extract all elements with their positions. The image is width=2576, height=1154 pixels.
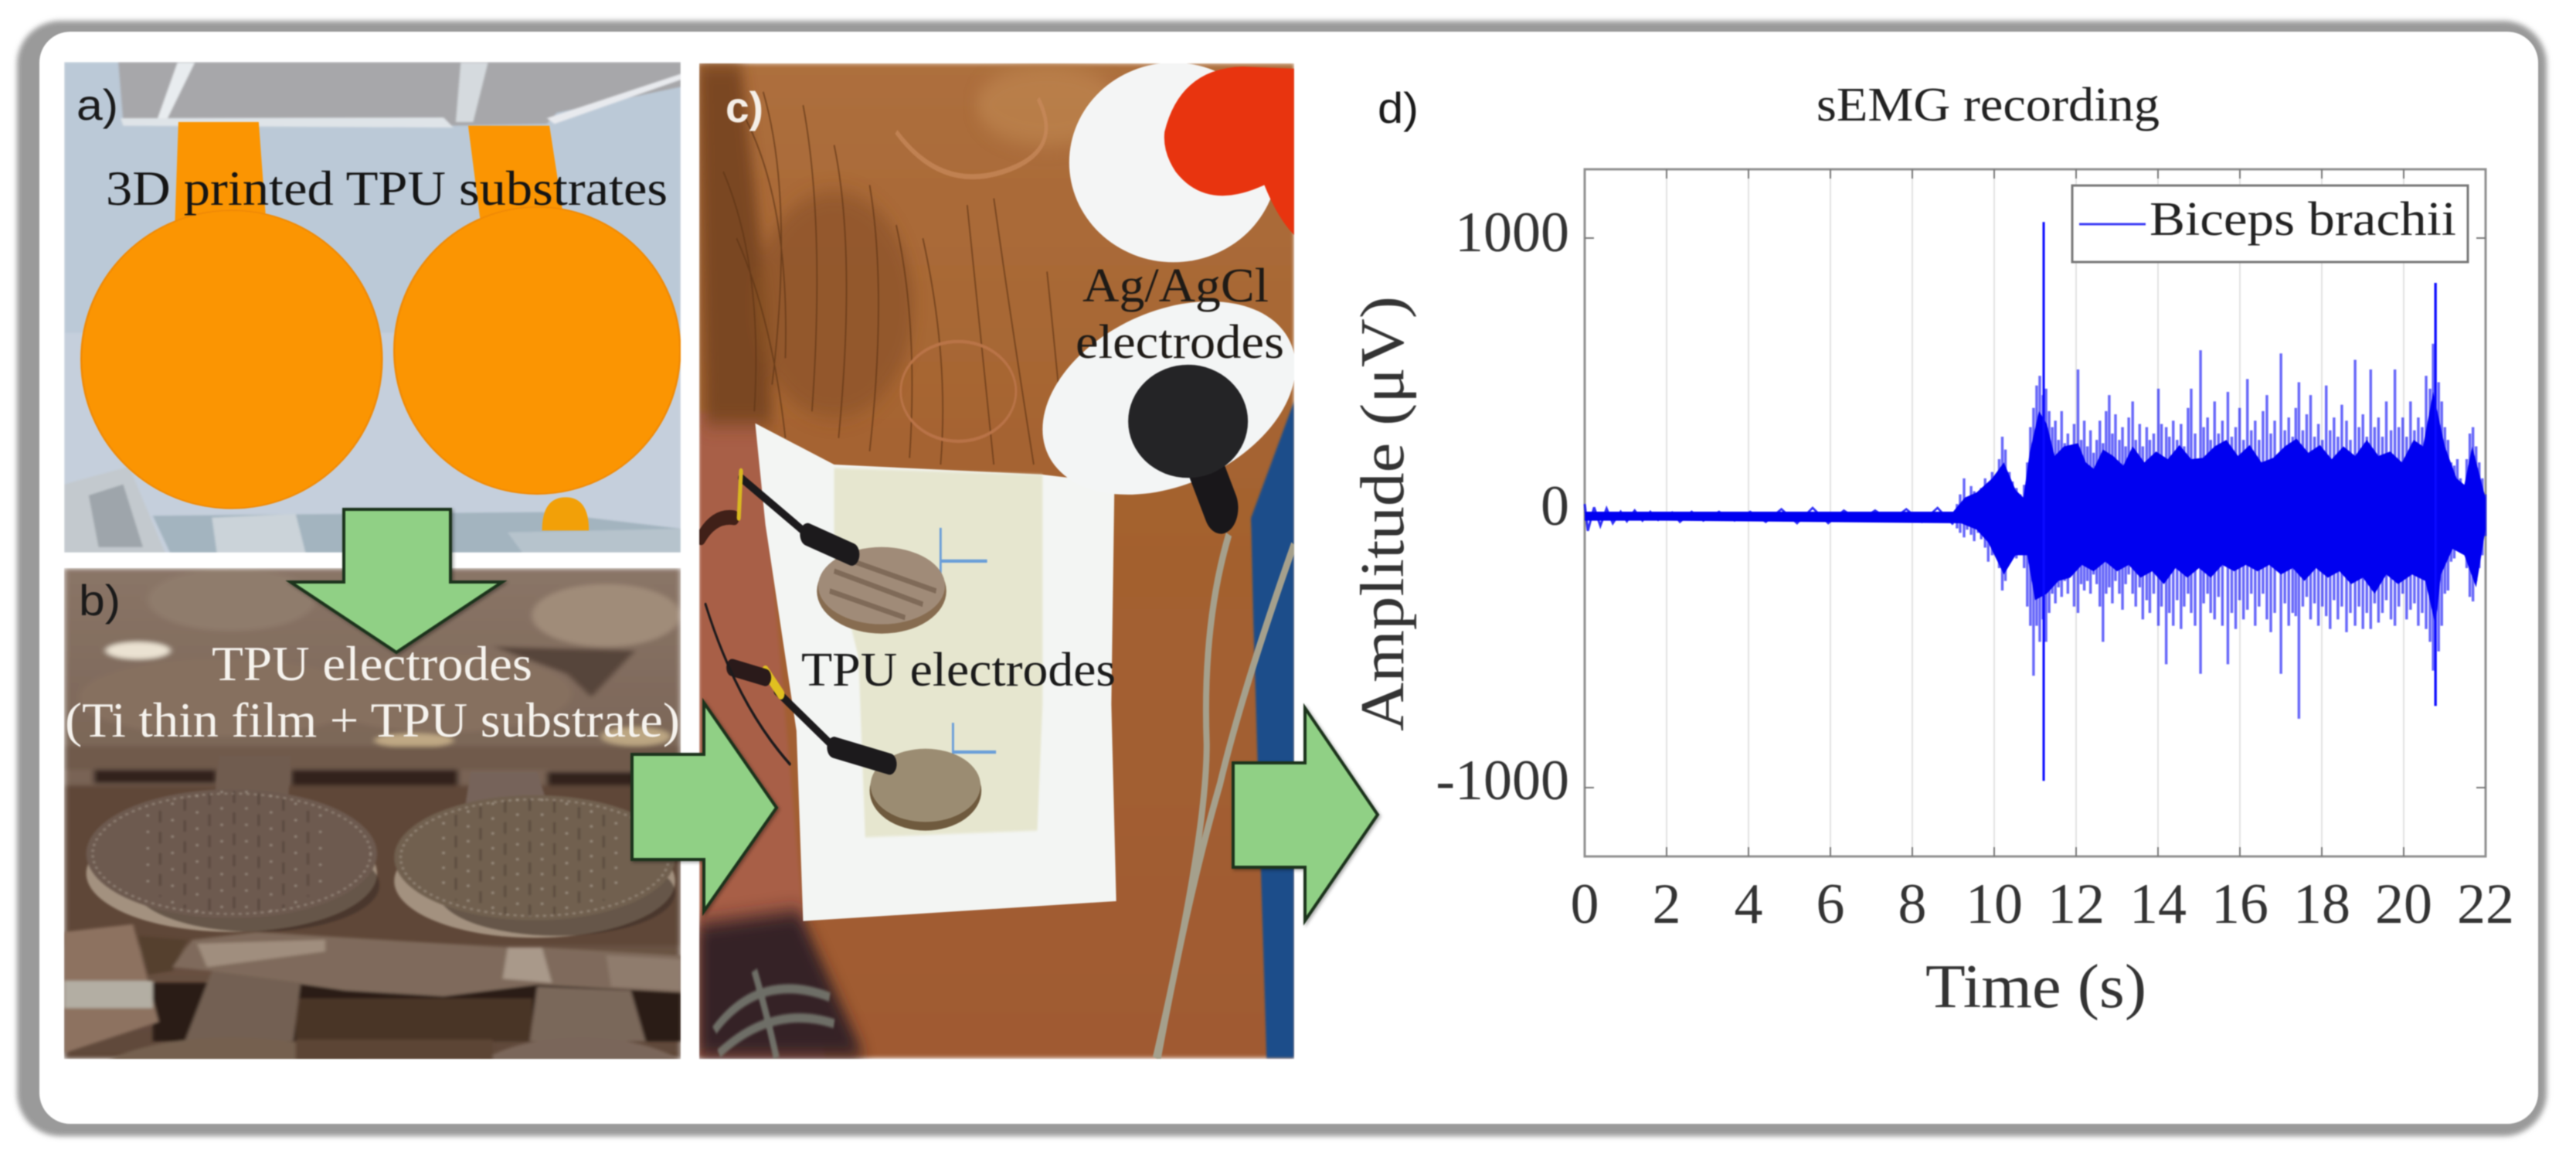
label a: a) bbox=[76, 80, 118, 129]
label: electrodes: electrodes bbox=[1076, 316, 1284, 369]
panel b: TPU electrodes photo bbox=[63, 567, 681, 1060]
label: TPU electrodes: TPU electrodes bbox=[801, 644, 1116, 696]
label d: d) bbox=[1378, 83, 1419, 132]
x-axis tick labels: 8 bbox=[1898, 873, 1927, 936]
legend bbox=[2072, 186, 2468, 262]
x-axis tick labels: 22 bbox=[2457, 873, 2514, 936]
arrow: b to c bbox=[632, 703, 777, 911]
panel c: electrodes on arm photo bbox=[699, 63, 1307, 1058]
x-axis tick labels: 6 bbox=[1816, 873, 1845, 936]
substrate left bbox=[81, 122, 382, 509]
x-axis title: Time (s) bbox=[1925, 953, 2146, 1021]
panel a: 3D printed TPU substrates photo bbox=[64, 62, 681, 553]
x-axis tick labels: 16 bbox=[2211, 873, 2268, 936]
grey lead wires bbox=[1156, 534, 1294, 1058]
subheading: Ti thin film + TPU substrate: (Ti thin film + TPU substrate) bbox=[65, 693, 680, 747]
substrate right bbox=[394, 126, 680, 530]
foil strip and lower stems bbox=[63, 923, 681, 1060]
x-axis tick labels: 10 bbox=[1966, 873, 2023, 936]
y-axis tick labels: -1000 bbox=[1436, 749, 1569, 812]
TPU electrode disk upper bbox=[817, 547, 946, 634]
arrow: c to d bbox=[1233, 708, 1378, 921]
x-axis tick labels: 12 bbox=[2048, 873, 2105, 936]
x-axis tick labels: 14 bbox=[2129, 873, 2187, 936]
legend: Biceps brachii bbox=[2149, 193, 2456, 246]
label c: c) bbox=[726, 83, 763, 131]
TPU electrode disk lower bbox=[870, 749, 981, 831]
heading: 3D printed TPU substrates: 3D printed TPU substrates bbox=[106, 161, 668, 216]
x-axis tick labels: 2 bbox=[1652, 873, 1681, 936]
x-axis tick labels bbox=[1570, 873, 2514, 936]
x-axis tick labels: 18 bbox=[2293, 873, 2350, 936]
y-axis tick labels bbox=[1436, 201, 1569, 812]
chart title: sEMG recording bbox=[1816, 79, 2160, 131]
plot grid and axes bbox=[1585, 169, 2486, 856]
panel d: sEMG chart bbox=[1349, 79, 2514, 1021]
white gauze with tape bbox=[755, 424, 1116, 921]
heading: TPU electrodes: TPU electrodes bbox=[212, 636, 532, 691]
y-axis title: Amplitude (μV) bbox=[1349, 296, 1417, 731]
sEMG signal trace bbox=[1585, 222, 2486, 781]
y-axis tick labels: 1000 bbox=[1455, 201, 1569, 264]
electrode left bbox=[87, 756, 379, 932]
hair and skin marks bbox=[723, 92, 1065, 465]
x-axis tick labels: 4 bbox=[1734, 873, 1763, 936]
label b: b) bbox=[79, 576, 121, 625]
y-axis tick labels: 0 bbox=[1541, 475, 1569, 538]
arrow: a to b bbox=[291, 509, 502, 652]
black wires bbox=[701, 471, 889, 764]
electrode right bbox=[394, 771, 675, 938]
x-axis tick labels: 20 bbox=[2375, 873, 2432, 936]
blue cross marks bbox=[940, 528, 996, 761]
x-axis tick labels: 0 bbox=[1570, 873, 1599, 936]
Ag/AgCl electrode lower with black snap bbox=[1031, 270, 1307, 526]
Ag/AgCl electrode top with red clip bbox=[1069, 63, 1294, 262]
label: Ag/AgCl: Ag/AgCl bbox=[1082, 260, 1269, 312]
